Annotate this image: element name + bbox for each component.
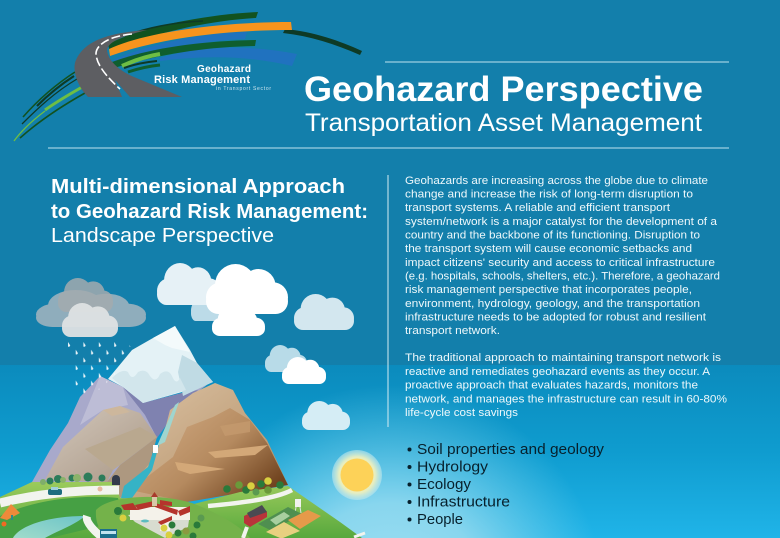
cyclist [98,486,102,492]
body text: first paragraph [405,175,720,337]
bullet list: Soil properties and geology [417,442,605,458]
mountain: snow peak [108,326,213,403]
clouds [36,263,354,430]
right cloud [294,294,354,330]
green land [0,482,362,538]
river [121,445,159,498]
body text: first paragraph: impact citizens' security and access to critical infrastructure [405,257,715,269]
body text: first paragraph: transport systems. A reliable and efficient transport [405,202,671,214]
title [304,62,729,137]
orchard trees [223,477,284,496]
mountain: tan [45,406,157,482]
white clouds centre [157,263,288,336]
body text: first paragraph: Geohazards are increasing across the globe due to climate [405,175,708,187]
tunnel [112,475,120,485]
body text: first paragraph: system/network is a major catalyst for the development of a [405,216,718,228]
logo text: Risk Management [154,74,250,86]
village trees [114,507,204,538]
bus [100,529,117,538]
heading: approach: to Geohazard Risk Management: [51,200,368,223]
mountain: purple back [32,376,207,490]
title main: Geohazard Perspective [304,70,703,109]
body text: first paragraph: (e.g. hospitals, schools, shelters, etc.). Therefore, a geohazard [405,270,720,282]
centre hill [96,497,250,538]
body text: first paragraph: country and the backbone of its functioning. Disruption to [405,230,700,242]
logo road [74,30,182,97]
mountain: brown back [120,383,288,502]
body text: second paragraph [405,352,727,419]
logo text: Geohazard [197,64,251,75]
body text: second paragraph: network, and manages the infrastructure can result in 60-80% [405,394,727,406]
small cloud pair [265,345,326,384]
logo text: in Transport Sector [216,86,271,92]
heading: approach [51,175,368,247]
title sub: Transportation Asset Management [305,109,702,137]
logo swooping bands [14,12,362,141]
body text: first paragraph: environment, hydrology, geology, and the transportation [405,298,700,310]
rain [67,342,132,396]
body text: first paragraph: transport network. [405,325,500,337]
landscape illustration [0,326,365,538]
sun [332,450,382,500]
storm cloud [36,278,146,337]
body text: first paragraph: change and increase the risk of long-term disruption to [405,189,693,201]
body text: second paragraph: The traditional approach to maintaining transport network is [405,352,721,364]
heading: approach: Multi-dimensional Approach [51,175,345,198]
body text: first paragraph: risk management perspective that incorporates people, [405,284,692,296]
body text: second paragraph: life-cycle cost savings [405,407,518,419]
right road [208,490,292,506]
bullet list: Ecology [417,477,472,493]
left road [0,490,119,503]
village [121,492,190,538]
waterfall [153,445,158,453]
logo text [154,64,271,92]
body text: first paragraph: the transport system will cause economic setbacks and [405,243,692,255]
mountain: brown front [130,408,288,502]
body text: second paragraph: reactive and remediates geohazard events as they occur. A [405,366,710,378]
water tower [295,499,301,513]
tree line left [40,472,106,485]
body text: first paragraph: infrastructure needs to be adopted for robust and resilient [405,311,707,323]
lower cloud [302,401,350,430]
mountain: tan foot [107,437,157,498]
farm fields [258,507,321,538]
body text: second paragraph: proactive approach that evaluates hazards, monitors the [405,380,698,392]
bullet list: People [417,512,463,528]
bullet list: Hydrology [417,460,489,476]
tent [0,504,20,526]
car [48,487,62,495]
heading: approach: Landscape Perspective [51,224,274,247]
centre road [87,516,103,538]
bullet list [408,442,605,528]
lake [13,516,85,538]
left hill [0,497,125,538]
barn [244,505,267,527]
logo: Geohazard Risk Management [14,12,362,141]
bullet list: Infrastructure [417,494,510,510]
title rule top [385,62,729,63]
